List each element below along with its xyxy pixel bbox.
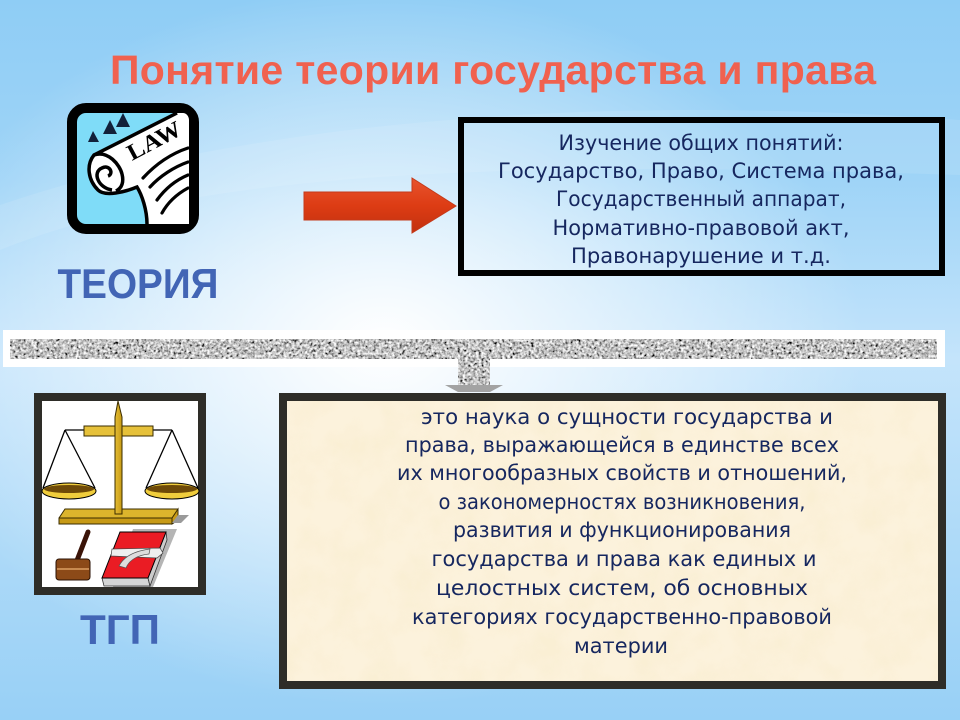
scales	[42, 401, 199, 524]
icon: scales, gavel and book	[38, 397, 202, 591]
panel: general concepts: Нормативно-правовой акт,	[552, 216, 850, 240]
panel: general concepts	[461, 120, 942, 273]
panel: general concepts: Правонарушение и т.д.	[571, 244, 831, 268]
panel: definition: целостных систем, об основных	[436, 576, 808, 600]
title: Понятие теории государства и права	[110, 47, 877, 93]
icon: law scroll	[72, 108, 194, 229]
panel: definition: материи	[574, 634, 668, 658]
panel: definition	[283, 397, 942, 685]
panel: definition: государства и права как единых и	[432, 547, 816, 571]
panel: definition: развития и функционирования	[453, 518, 791, 542]
panel: definition: о закономерностях возникновения,	[438, 490, 806, 514]
label: ТГП: ТГП	[80, 606, 160, 653]
panel: general concepts: Изучение общих понятий:	[558, 131, 844, 155]
panel: definition: это наука о сущности государства и	[421, 405, 833, 429]
icon: law scroll: LAW	[123, 116, 186, 165]
arrow: right	[304, 178, 456, 233]
panel: general concepts: Государственный аппарат,	[556, 187, 846, 211]
panel: definition: права, выражающейся в единстве всех	[405, 433, 839, 457]
gavel	[56, 532, 90, 580]
connector: textured band with down arrow	[3, 330, 945, 392]
panel: definition: их многообразных свойств и отношений,	[397, 461, 847, 485]
book	[102, 529, 177, 587]
panel: definition: категориях государственно-правовой	[412, 605, 832, 629]
label: ТЕОРИЯ: ТЕОРИЯ	[58, 260, 218, 307]
panel: general concepts: Государство, Право, Система права,	[498, 159, 904, 183]
